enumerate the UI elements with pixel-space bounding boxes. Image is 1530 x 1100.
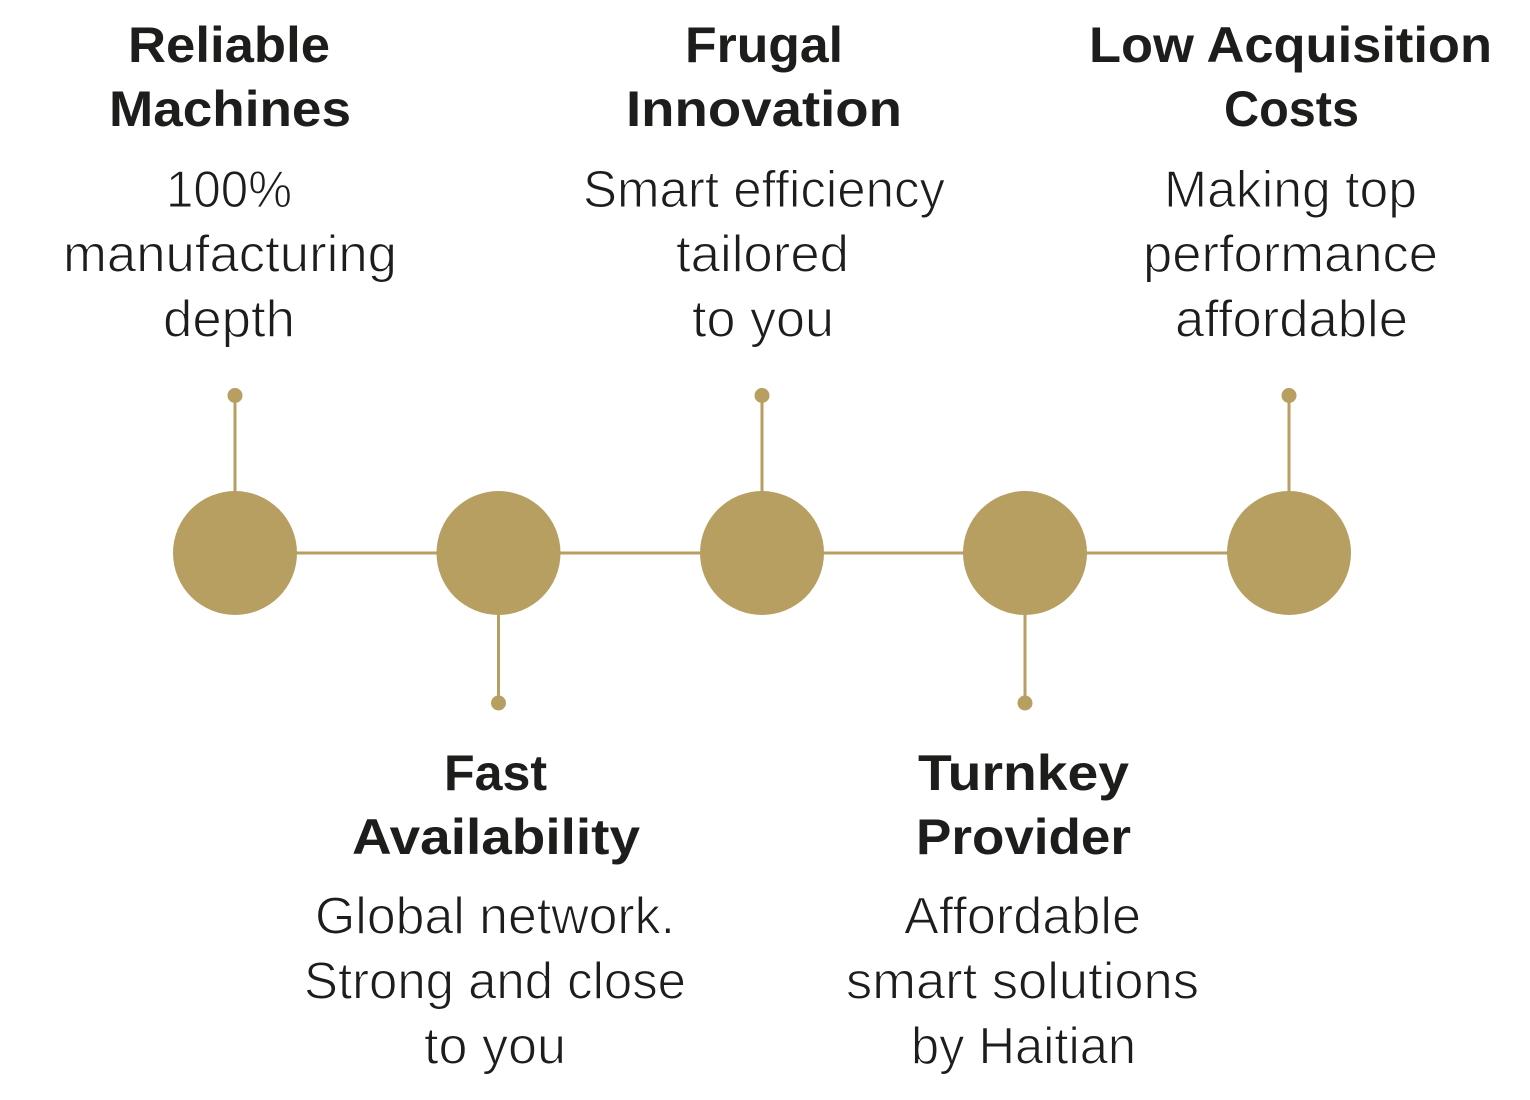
description: Smart efficiency — [583, 161, 945, 219]
description: depth — [163, 290, 295, 348]
description: manufacturing — [63, 226, 397, 284]
heading: Innovation — [626, 81, 902, 137]
heading: Frugal — [685, 17, 843, 73]
heading — [352, 745, 640, 865]
node 3 with stem up — [700, 388, 824, 615]
description — [1143, 161, 1438, 348]
heading: Provider — [916, 809, 1131, 865]
heading: Machines — [109, 81, 351, 137]
description — [583, 161, 945, 348]
heading: Reliable — [128, 17, 330, 73]
description: to you — [424, 1018, 566, 1076]
heading — [626, 17, 902, 137]
node 4 with stem down — [963, 491, 1087, 710]
heading — [109, 17, 351, 137]
node 2 with stem down — [436, 491, 560, 710]
description: by Haitian — [911, 1018, 1136, 1076]
block: Frugal Innovation — [583, 17, 945, 348]
description: 100% — [166, 161, 292, 219]
timeline with nodes and connectors — [173, 388, 1351, 710]
description: tailored — [676, 226, 849, 284]
description: Strong and close — [304, 952, 686, 1010]
block: Low Acquisition Costs — [1089, 17, 1492, 348]
heading: Availability — [352, 809, 640, 865]
heading — [916, 745, 1131, 865]
block: Reliable Machines — [63, 17, 397, 348]
description: performance — [1143, 226, 1438, 284]
description: to you — [692, 290, 834, 348]
description: Global network. — [315, 888, 675, 946]
block: Turnkey Provider — [846, 745, 1199, 1076]
heading — [1089, 17, 1492, 137]
heading: Turnkey — [918, 745, 1129, 801]
description — [304, 888, 686, 1076]
horizontal connector — [235, 552, 1289, 554]
description: Making top — [1164, 161, 1417, 219]
description — [63, 161, 397, 348]
heading: Fast — [444, 745, 547, 801]
node 1 with stem up — [173, 388, 297, 615]
description: smart solutions — [846, 952, 1199, 1010]
description — [846, 888, 1199, 1076]
block: Fast Availability — [304, 745, 686, 1076]
description: Affordable — [904, 888, 1141, 946]
node 5 with stem up — [1227, 388, 1351, 615]
description: affordable — [1175, 290, 1408, 348]
heading: Costs — [1224, 81, 1359, 137]
heading: Low Acquisition — [1089, 17, 1492, 73]
